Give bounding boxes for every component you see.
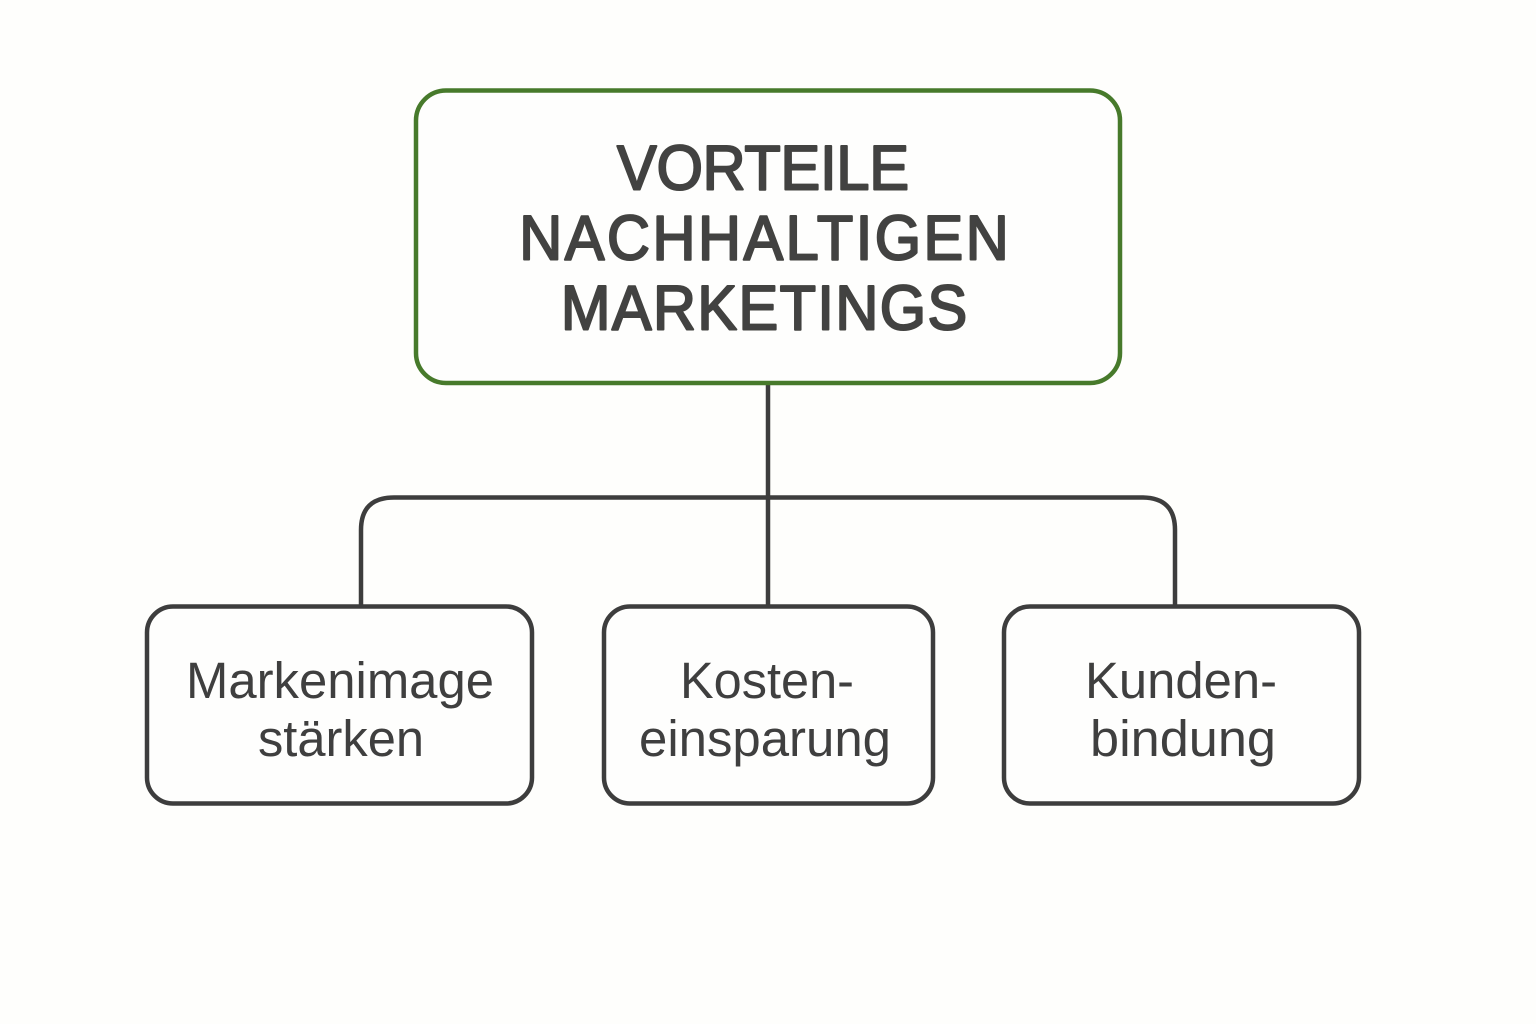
- box: Kundenbindung: bindung: [1090, 710, 1276, 767]
- title text: NACHHALTIGEN: [519, 203, 1009, 273]
- connector lines: [361, 383, 1175, 605]
- box: Kundenbindung: [1004, 606, 1359, 804]
- box: Kosteneinsparung: Kosten-: [680, 652, 854, 709]
- title text: [519, 133, 1009, 343]
- box: Markenimage stärken: stärken: [258, 710, 424, 767]
- box: Markenimage stärken: [147, 606, 532, 804]
- box: Kosteneinsparung: einsparung: [639, 710, 891, 767]
- main box: title: [416, 90, 1120, 383]
- box: Kosteneinsparung: [604, 606, 933, 804]
- box: Markenimage stärken: Markenimage: [186, 652, 494, 709]
- title text: VORTEILE: [617, 133, 909, 203]
- title text: MARKETINGS: [561, 273, 967, 343]
- box: Kundenbindung: Kunden-: [1085, 652, 1277, 709]
